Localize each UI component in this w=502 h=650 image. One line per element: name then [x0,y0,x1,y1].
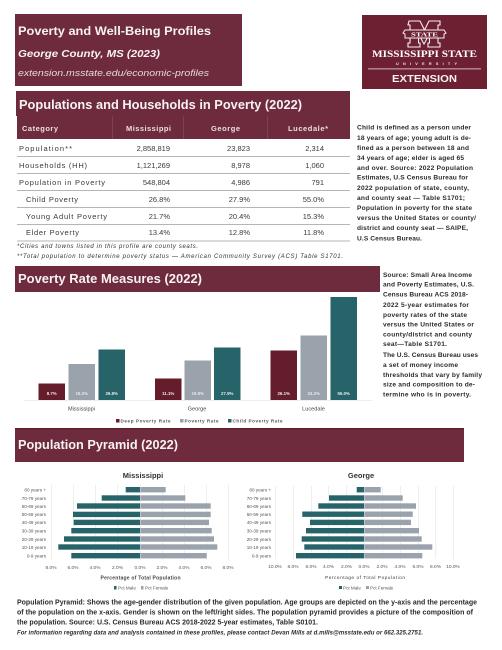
table footnotes: *Cities and towns listed in this profile are county seats. [17,244,198,250]
table rows: Child Poverty [26,195,78,204]
age labels: 10-19 years [247,545,272,550]
text block: poverty rate source: county/district and county [383,332,472,338]
chart title: Mississippi: Mississippi [123,471,163,480]
x axis labels: 4.0% [90,565,101,571]
category labels: Lucedale [302,406,325,412]
text block: definitions and sources: Estimates, U.S Census Bureau for [357,174,468,182]
chart legend: Child Poverty Rate [232,418,283,424]
text block: definitions and sources: 18 years of age; young adult is de- [357,135,471,142]
x axis labels: 8.0% [288,564,299,570]
text block: poverty rate source: seat—Table S1701. [383,341,447,348]
x axis labels: 2.0% [112,565,124,571]
x axis title: Percentage of Total Population [325,575,405,581]
bars: Mississippi: 19.2% [75,391,88,396]
age labels: 30-39 years [247,528,272,534]
table rows: 27.9% [229,195,250,204]
age labels [22,488,47,558]
bars: George: 11.1% [162,391,174,396]
table header row [17,116,350,139]
website link: extension.msstate.edu/economic-profiles [18,68,209,79]
logo: Mississippi State University Extension: MISSISSIPPI STATE [372,49,477,59]
table rows: 8,978 [231,161,250,170]
table rows: Young Adult Poverty [26,212,107,221]
category labels: George [188,406,206,412]
table rows: 23,823 [227,144,250,153]
table rows: 1,121,269 [137,161,170,170]
logo: Mississippi State University Extension: STATE [411,32,438,38]
text block: definitions and sources: Population in poverty for the state [357,205,472,212]
bars: George [155,348,240,400]
table footnotes: **Total population to determine poverty status — American Community Survey (ACS) Table S1701. [17,254,343,260]
contact line: For information regarding data and analysis contained in these profiles, please contact Devan Mills at d.mills@msstate.edu or 662.325.2751. [17,630,423,636]
table rows: Population in Poverty [19,178,105,187]
bars: Lucedale: 55.0% [337,391,350,396]
bars: Lucedale: 26.1% [277,391,290,396]
age labels: 60-69 years [247,504,272,509]
text block: poverty rate source: termine who is in poverty. [383,392,471,398]
x axis labels: 4.0% [179,565,190,571]
text block: poverty rate source: and Poverty Estimates, U.S. [383,282,474,288]
table rows: Elder Poverty [26,228,79,237]
bar chart: poverty rate measures [24,297,372,424]
logo: Mississippi State University Extension [362,15,487,89]
logo: Mississippi State University Extension: EXTENSION [392,74,457,85]
text block: definitions and sources: fined as a person between 18 and [357,145,469,152]
chart: Mississippi population pyramid [22,471,234,590]
table rows: 13.4% [149,228,170,237]
text block: poverty rate source: thresholds that vary by family [383,372,482,379]
x axis labels: 6.0% [306,564,317,570]
table rows: 4,986 [231,178,250,187]
legend: Pct Male [343,586,361,590]
x axis labels: 2.0% [341,564,353,570]
legend: Pct Male [118,586,136,590]
logo: Mississippi State University Extension: UNIVERSITY [396,62,457,66]
female bars [140,487,217,558]
heading: populations and households [16,91,350,116]
table rows: 791 [311,178,324,187]
chart legend [116,418,283,424]
table rows: 20.4% [229,212,250,221]
age labels: 20-29 years [22,537,47,542]
x axis labels: 8.0% [223,565,234,571]
panel: populations and households table [16,91,350,242]
table header row: Mississippi [126,124,171,133]
table rows: 2,314 [305,144,324,153]
age labels: 70-79 years [22,496,47,501]
age labels: 0-9 years [27,554,47,558]
x axis labels: 2.0% [157,565,168,571]
category labels: Mississippi [68,406,95,412]
x axis labels [268,564,461,570]
table header row: Category [22,124,59,133]
age labels: 20-29 years [247,537,272,542]
bars: Mississippi [38,350,125,400]
chart title: George: George [348,471,374,480]
x axis labels: 0.0% [359,564,370,570]
x axis labels: 0.0% [135,565,146,571]
chart legend: Deep Poverty Rate [120,418,171,424]
table rows: 55.0% [303,195,324,204]
male bars [58,487,140,558]
text block: definitions and sources: and over. Source: 2022 Population [357,165,473,172]
text block: poverty rate source: Census Bureau ACS 2018- [383,292,468,298]
x axis labels: 6.0% [413,564,424,570]
text block: definitions and sources [357,124,476,242]
age labels: 30-39 years [22,528,47,534]
age labels: 40-49 years [22,520,47,525]
x axis labels: 10.0% [268,564,283,570]
text block: poverty rate source: The U.S. Census Bureau uses [383,352,478,359]
text block: population pyramid note: of the population on the x-axis. Gender is shown on the left/right sides. The population pyramid provides a picture of the composition of [17,610,474,616]
text block: definitions and sources: district and county seat — SAIPE, [357,225,468,232]
age labels: 50-59 years [247,512,272,517]
table rows: 12.8% [229,228,250,237]
x axis labels: 8.0% [430,564,442,570]
bars: George: 19.9% [191,391,204,396]
chart legend: Poverty Rate [184,418,219,424]
title: Poverty and Well-Being Profiles [18,24,211,38]
text block: population pyramid note [17,600,477,626]
text block: population pyramid note: the population. Source: U.S. Census Bureau ACS 2018-2022 5-year estimates, Table S0101. [17,620,318,626]
subtitle: county: George County, MS (2023) [18,48,161,60]
x axis labels: 8.0% [46,565,57,571]
age labels: 80 years + [249,488,271,492]
text block: definitions and sources: versus the United States or county/ [357,215,476,222]
heading: population pyramid [15,428,464,462]
text block: definitions and sources: 34 years of age; elder is aged 65 [357,155,464,162]
text block: definitions and sources: and county seat — Table S1701; [357,195,465,202]
bars: George: 27.9% [221,391,234,396]
x axis labels: 2.0% [377,564,388,570]
x axis labels: 10.0% [446,564,461,570]
header panel [15,14,242,86]
age labels: 10-19 years [22,545,47,550]
female bars [364,487,432,558]
text block: definitions and sources: Child is defined as a person under [357,124,471,132]
table rows: 1,060 [305,161,324,170]
bars: Mississippi: 26.8% [105,391,118,396]
table rows: 2,858,819 [137,144,170,153]
male bars [296,487,364,558]
x axis title: Percentage of Total Population [100,576,180,582]
table rows [19,144,324,237]
table rows: Population** [19,144,72,153]
table rows: 548,804 [143,178,170,187]
x axis labels: 6.0% [68,565,79,571]
age labels: 0-9 years [252,554,272,558]
table rows: 15.3% [303,212,324,221]
text block: poverty rate source [383,272,482,398]
legend [114,586,169,590]
legend: Pct Female [370,586,394,590]
bars: Lucedale [270,297,357,400]
text block: definitions and sources: 2022 population of state, county, [357,185,469,192]
text block: poverty rate source: versus the United States or [383,322,474,328]
heading: population pyramid: Population Pyramid (2022) [18,437,178,452]
chart: George population pyramid [247,471,461,590]
legend [339,586,394,590]
bars: Lucedale: 34.2% [307,391,320,396]
x axis labels: 4.0% [395,564,406,570]
heading: poverty rate measures: Poverty Rate Measures (2022) [18,271,202,286]
x axis labels [46,565,234,571]
bars: Mississippi: 8.7% [47,391,57,396]
table header row: Lucedale* [288,124,328,133]
age labels: 50-59 years [22,512,47,517]
table rows: 11.8% [303,228,324,237]
age labels: 40-49 years [247,520,272,525]
text block: poverty rate source: size and composition to de- [383,382,475,388]
heading: poverty rate measures [15,266,380,292]
text block: definitions and sources: U.S Census Bureau. [357,236,422,242]
table footnotes [17,244,343,260]
age labels: 60-69 years [22,504,47,509]
x axis labels: 6.0% [201,565,212,571]
x axis labels: 4.0% [323,564,335,570]
legend: Pct Female [145,586,169,590]
table header row: George [211,124,240,133]
text block: poverty rate source: a set of money income [383,362,458,369]
table rows: Households (HH) [19,161,88,170]
age labels [247,488,272,558]
age labels: 70-79 years [247,496,272,501]
category labels [68,406,325,412]
text block: poverty rate source: poverty rates of the state [383,312,467,319]
age labels: 80 years + [24,488,46,492]
text block: poverty rate source: 2022 5-year estimates for [383,302,469,309]
table rows: 26.8% [149,195,170,204]
table rows: 21.7% [149,212,170,221]
text block: population pyramid note: Population Pyramid: Shows the age-gender distribution of the given population. Age groups are depicted on the y-axis and the percentage [17,600,477,606]
heading: populations and households: Populations and Households in Poverty (2022) [19,98,302,112]
text block: poverty rate source: Source: Small Area Income [383,272,472,279]
